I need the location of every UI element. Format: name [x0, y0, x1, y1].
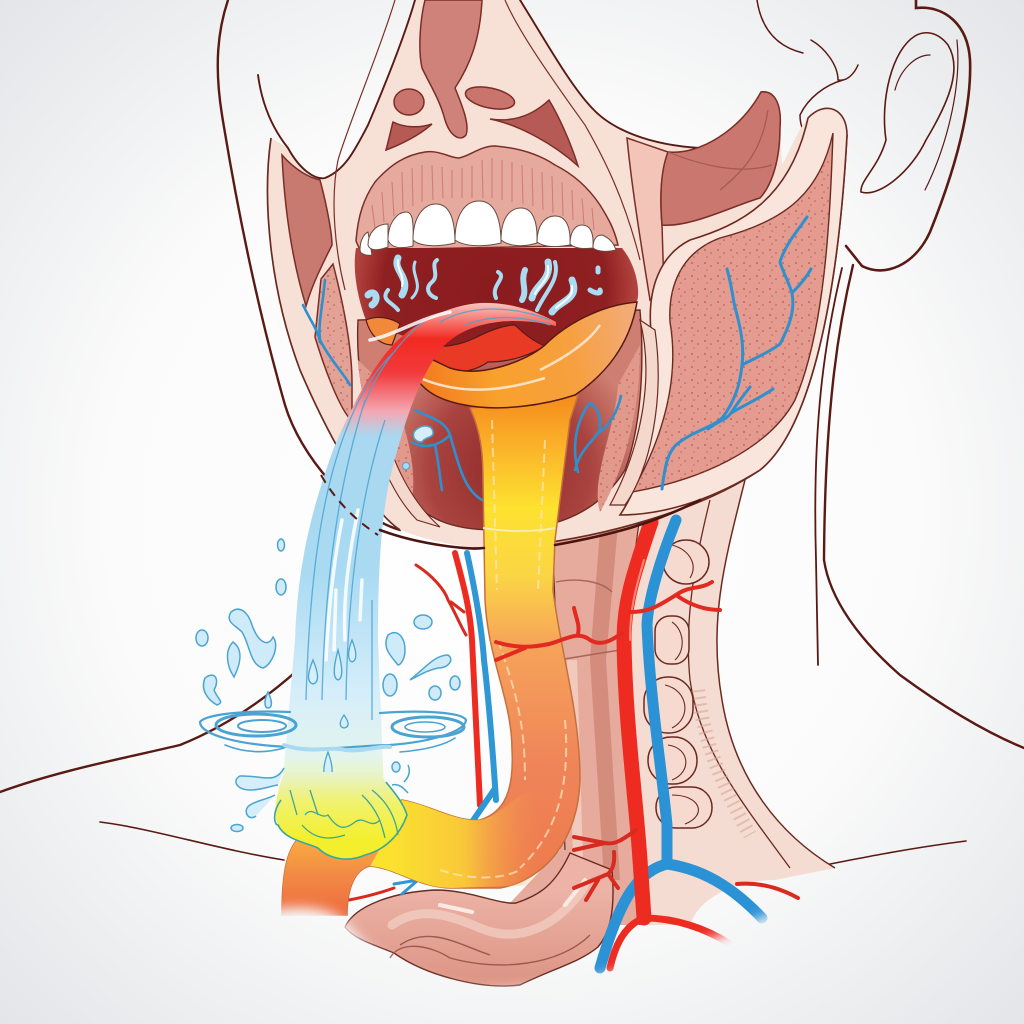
bowl top	[411, 302, 637, 408]
face edge lines	[258, 0, 762, 178]
ripple rings	[200, 712, 466, 752]
yellow splash	[236, 768, 407, 859]
gland veins	[662, 217, 811, 489]
main artery and vein	[600, 520, 798, 968]
stream drips	[308, 640, 356, 792]
tube highlights	[440, 420, 566, 878]
trachea column	[510, 515, 640, 925]
steam swirls left	[368, 258, 437, 310]
neck and spine backdrop	[605, 480, 835, 925]
artery branches over tube	[496, 608, 636, 900]
upper lip	[356, 146, 618, 250]
nasal septum	[334, 0, 640, 290]
inner throat	[358, 310, 658, 530]
mouth cavity	[355, 248, 638, 372]
jaw lower edge	[380, 500, 700, 548]
esophagus tube	[282, 302, 637, 915]
stomach	[345, 853, 613, 986]
throat droplets	[413, 426, 433, 442]
yellow lower bend	[370, 790, 540, 888]
ear	[846, 0, 970, 270]
left pipe	[282, 825, 385, 915]
left vessels	[349, 553, 496, 900]
dashed jaw line	[321, 475, 378, 535]
right gland	[620, 108, 847, 515]
upper right joint structure	[627, 92, 780, 300]
jaw and cheek tissue base	[268, 0, 847, 548]
water stream	[282, 303, 556, 792]
cheek and jaw outline	[268, 135, 847, 548]
left cheek veins	[303, 280, 350, 385]
water droplets	[196, 539, 460, 832]
teeth	[360, 201, 616, 255]
steam swirls right	[495, 262, 600, 312]
bottom fade	[220, 905, 860, 1024]
left cheek muscle	[282, 155, 352, 421]
vertebral discs	[644, 540, 712, 828]
throat veins	[412, 396, 621, 500]
stream lines	[306, 309, 550, 720]
tongue remnant	[420, 325, 545, 372]
tube body	[282, 395, 580, 915]
